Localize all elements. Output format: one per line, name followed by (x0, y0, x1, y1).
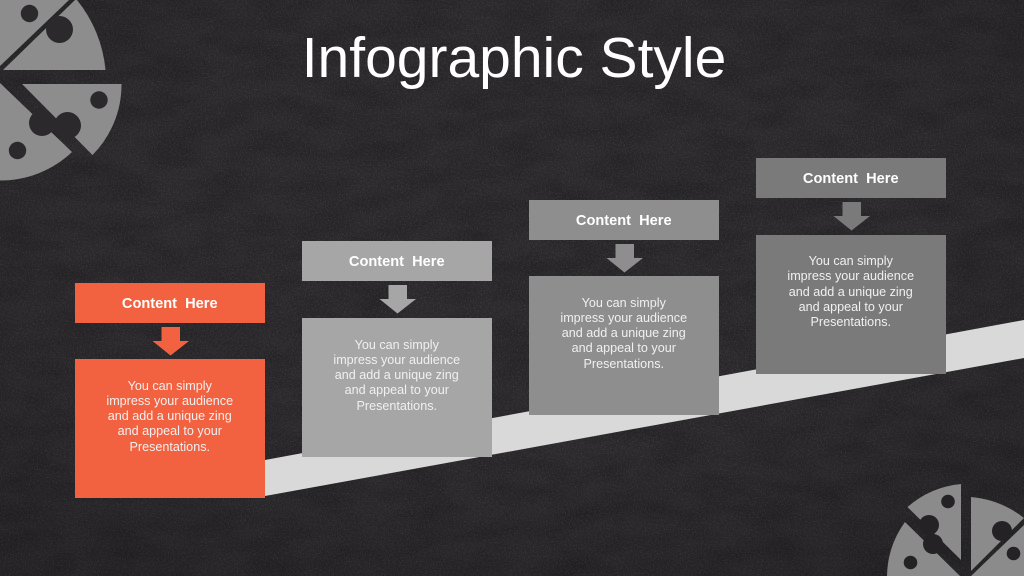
step 2 text: You can simply (355, 338, 439, 352)
title: Infographic Style (302, 26, 726, 90)
icon: pizza slices top-left (0, 0, 122, 180)
step 4 arrow (834, 202, 870, 230)
step 3 heading (528, 200, 719, 240)
step 4 text (756, 234, 946, 374)
step 1 heading (74, 283, 265, 322)
step 1 heading: Content Here (122, 296, 218, 312)
step 2 heading (302, 241, 492, 280)
step 3 text: impress your audience (560, 311, 687, 325)
step 1 (75, 283, 265, 498)
step 4 text: and add a unique zing (789, 285, 913, 299)
step 1 text: and appeal to your (118, 424, 222, 438)
step 3 text (528, 276, 719, 415)
step 4 text: You can simply (809, 254, 893, 268)
step 4 text: and appeal to your (799, 300, 903, 314)
step 3 (529, 200, 719, 415)
step 1 text: You can simply (128, 378, 212, 392)
step 4 heading: Content Here (803, 171, 899, 187)
step 4 text: impress your audience (787, 269, 914, 283)
step 1 arrow (152, 327, 189, 356)
step 1 text: impress your audience (106, 394, 233, 408)
step 2 (302, 241, 492, 457)
step 3 arrow (606, 244, 643, 272)
step 4 (756, 158, 946, 374)
step 2 text: and add a unique zing (335, 368, 459, 382)
step 4 text: Presentations. (810, 315, 891, 329)
step 2 text: and appeal to your (345, 383, 449, 397)
step 2 heading: Content Here (349, 254, 445, 270)
icon: pizza slices bottom-right (887, 484, 1024, 576)
step 2 text (302, 318, 492, 457)
step 3 text: and add a unique zing (562, 326, 686, 340)
step 1 text: and add a unique zing (108, 409, 232, 423)
step 3 text: You can simply (582, 296, 666, 310)
step 1 text: Presentations. (129, 440, 210, 454)
step 1 text (74, 359, 265, 498)
step 2 text: Presentations. (356, 399, 437, 413)
step 2 text: impress your audience (333, 353, 460, 367)
step 2 arrow (380, 285, 416, 314)
step 3 heading: Content Here (576, 213, 672, 229)
step 3 text: Presentations. (583, 357, 664, 371)
step 4 heading (756, 158, 946, 198)
step 3 text: and appeal to your (572, 341, 676, 355)
